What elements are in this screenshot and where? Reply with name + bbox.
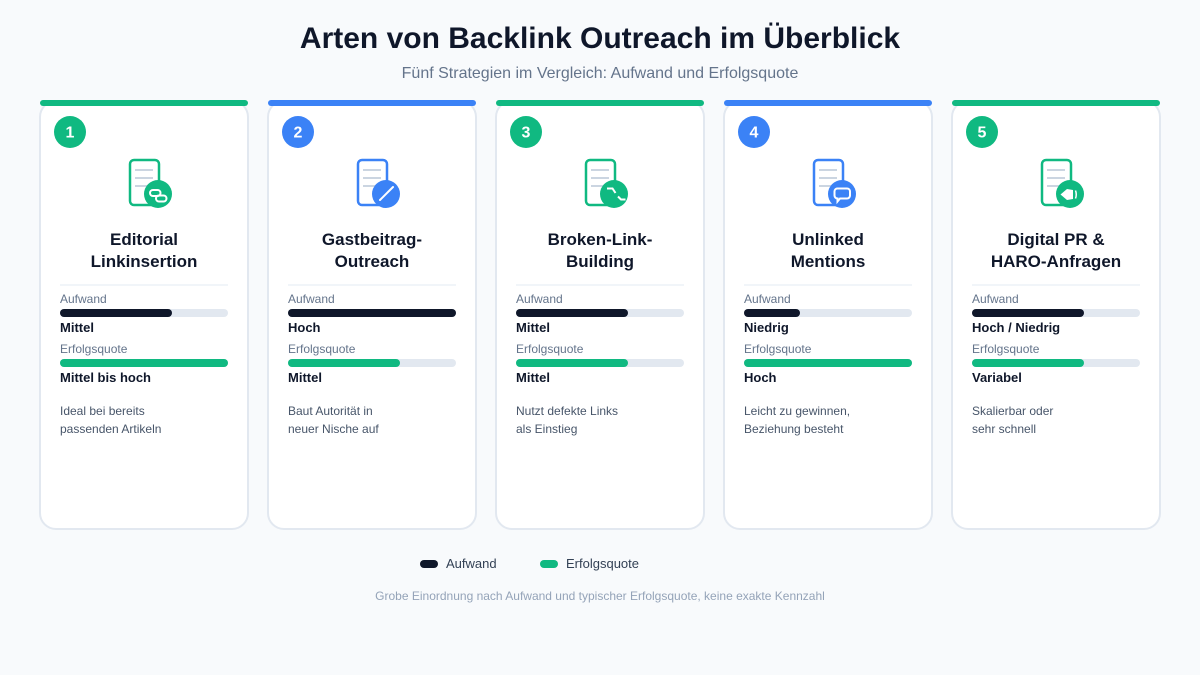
Aufwand meter bbox=[516, 292, 684, 335]
Aufwand meter: Aufwand bbox=[744, 292, 791, 306]
Erfolgsquote meter: Erfolgsquote bbox=[744, 342, 812, 356]
Erfolgsquote meter: Variabel bbox=[972, 370, 1022, 385]
number badge 3: 3 bbox=[522, 124, 531, 142]
heading: Digital PR & bbox=[1007, 230, 1105, 249]
Erfolgsquote meter bbox=[60, 342, 228, 385]
number badge 4 bbox=[738, 116, 770, 148]
Erfolgsquote meter bbox=[288, 342, 456, 385]
legend: Aufwand bbox=[446, 556, 497, 571]
description: Ideal bei bereits bbox=[60, 404, 145, 418]
Aufwand meter: Aufwand bbox=[516, 292, 563, 306]
Erfolgsquote meter bbox=[744, 342, 912, 385]
legend bbox=[420, 556, 639, 571]
Aufwand meter: Hoch / Niedrig bbox=[972, 320, 1060, 335]
panel: Gastbeitrag-Outreach bbox=[268, 100, 476, 529]
Erfolgsquote meter: Erfolgsquote bbox=[288, 342, 356, 356]
icon: document with chain link bbox=[130, 160, 172, 208]
Aufwand meter: Mittel bbox=[60, 320, 94, 335]
panel: Unlinked Mentions bbox=[724, 100, 932, 529]
number badge 1: 1 bbox=[66, 124, 75, 142]
subtitle: Fünf Strategien im Vergleich: Aufwand und Erfolgsquote bbox=[402, 65, 798, 82]
Aufwand meter bbox=[288, 292, 456, 335]
heading: Outreach bbox=[335, 252, 409, 271]
description: passenden Artikeln bbox=[60, 422, 161, 436]
number badge 5: 5 bbox=[978, 124, 987, 142]
Aufwand meter: Mittel bbox=[516, 320, 550, 335]
panel: Broken-Link-Building bbox=[496, 100, 704, 529]
heading: Editorial bbox=[110, 230, 178, 249]
Erfolgsquote meter: Erfolgsquote bbox=[60, 342, 128, 356]
number badge 2: 2 bbox=[294, 124, 303, 142]
footnote: Grobe Einordnung nach Aufwand und typischer Erfolgsquote, keine exakte Kennzahl bbox=[375, 589, 825, 603]
Aufwand meter bbox=[972, 292, 1140, 335]
description: als Einstieg bbox=[516, 422, 577, 436]
description: Nutzt defekte Links bbox=[516, 404, 618, 418]
Aufwand meter: Aufwand bbox=[60, 292, 107, 306]
number badge 3 bbox=[510, 116, 542, 148]
heading: Mentions bbox=[791, 252, 865, 271]
heading: HARO-Anfragen bbox=[991, 252, 1121, 271]
number badge 5 bbox=[966, 116, 998, 148]
Aufwand meter bbox=[744, 292, 912, 335]
number badge 4: 4 bbox=[750, 124, 759, 142]
Aufwand meter bbox=[60, 292, 228, 335]
Aufwand meter: Aufwand bbox=[972, 292, 1019, 306]
heading: Broken-Link- bbox=[548, 230, 652, 249]
heading: Linkinsertion bbox=[91, 252, 197, 271]
legend: Erfolgsquote bbox=[566, 556, 639, 571]
number badge 1 bbox=[54, 116, 86, 148]
panel: Digital PR & HARO-Anfragen bbox=[952, 100, 1160, 529]
description: Leicht zu gewinnen, bbox=[744, 404, 850, 418]
title: Arten von Backlink Outreach im Überblick bbox=[300, 22, 900, 55]
Erfolgsquote meter: Mittel bbox=[516, 370, 550, 385]
description: Beziehung besteht bbox=[744, 422, 844, 436]
Erfolgsquote meter: Hoch bbox=[744, 370, 777, 385]
Aufwand meter: Aufwand bbox=[288, 292, 335, 306]
description: neuer Nische auf bbox=[288, 422, 379, 436]
number badge 2 bbox=[282, 116, 314, 148]
Aufwand meter: Niedrig bbox=[744, 320, 789, 335]
Erfolgsquote meter: Erfolgsquote bbox=[516, 342, 584, 356]
Erfolgsquote meter: Mittel bbox=[288, 370, 322, 385]
heading: Unlinked bbox=[792, 230, 864, 249]
panel: Editorial Linkinsertion bbox=[40, 100, 248, 529]
Erfolgsquote meter: Erfolgsquote bbox=[972, 342, 1040, 356]
heading: Building bbox=[566, 252, 634, 271]
description: Skalierbar oder bbox=[972, 404, 1053, 418]
icon: document with megaphone bbox=[1042, 160, 1084, 208]
description: Baut Autorität in bbox=[288, 404, 373, 418]
Erfolgsquote meter: Mittel bis hoch bbox=[60, 370, 151, 385]
Aufwand meter: Hoch bbox=[288, 320, 321, 335]
icon: document with speech bubble bbox=[814, 160, 856, 208]
Erfolgsquote meter bbox=[972, 342, 1140, 385]
icon: document with broken link bbox=[586, 160, 628, 208]
description: sehr schnell bbox=[972, 422, 1036, 436]
Erfolgsquote meter bbox=[516, 342, 684, 385]
heading: Gastbeitrag- bbox=[322, 230, 422, 249]
icon: document with pen bbox=[358, 160, 400, 208]
